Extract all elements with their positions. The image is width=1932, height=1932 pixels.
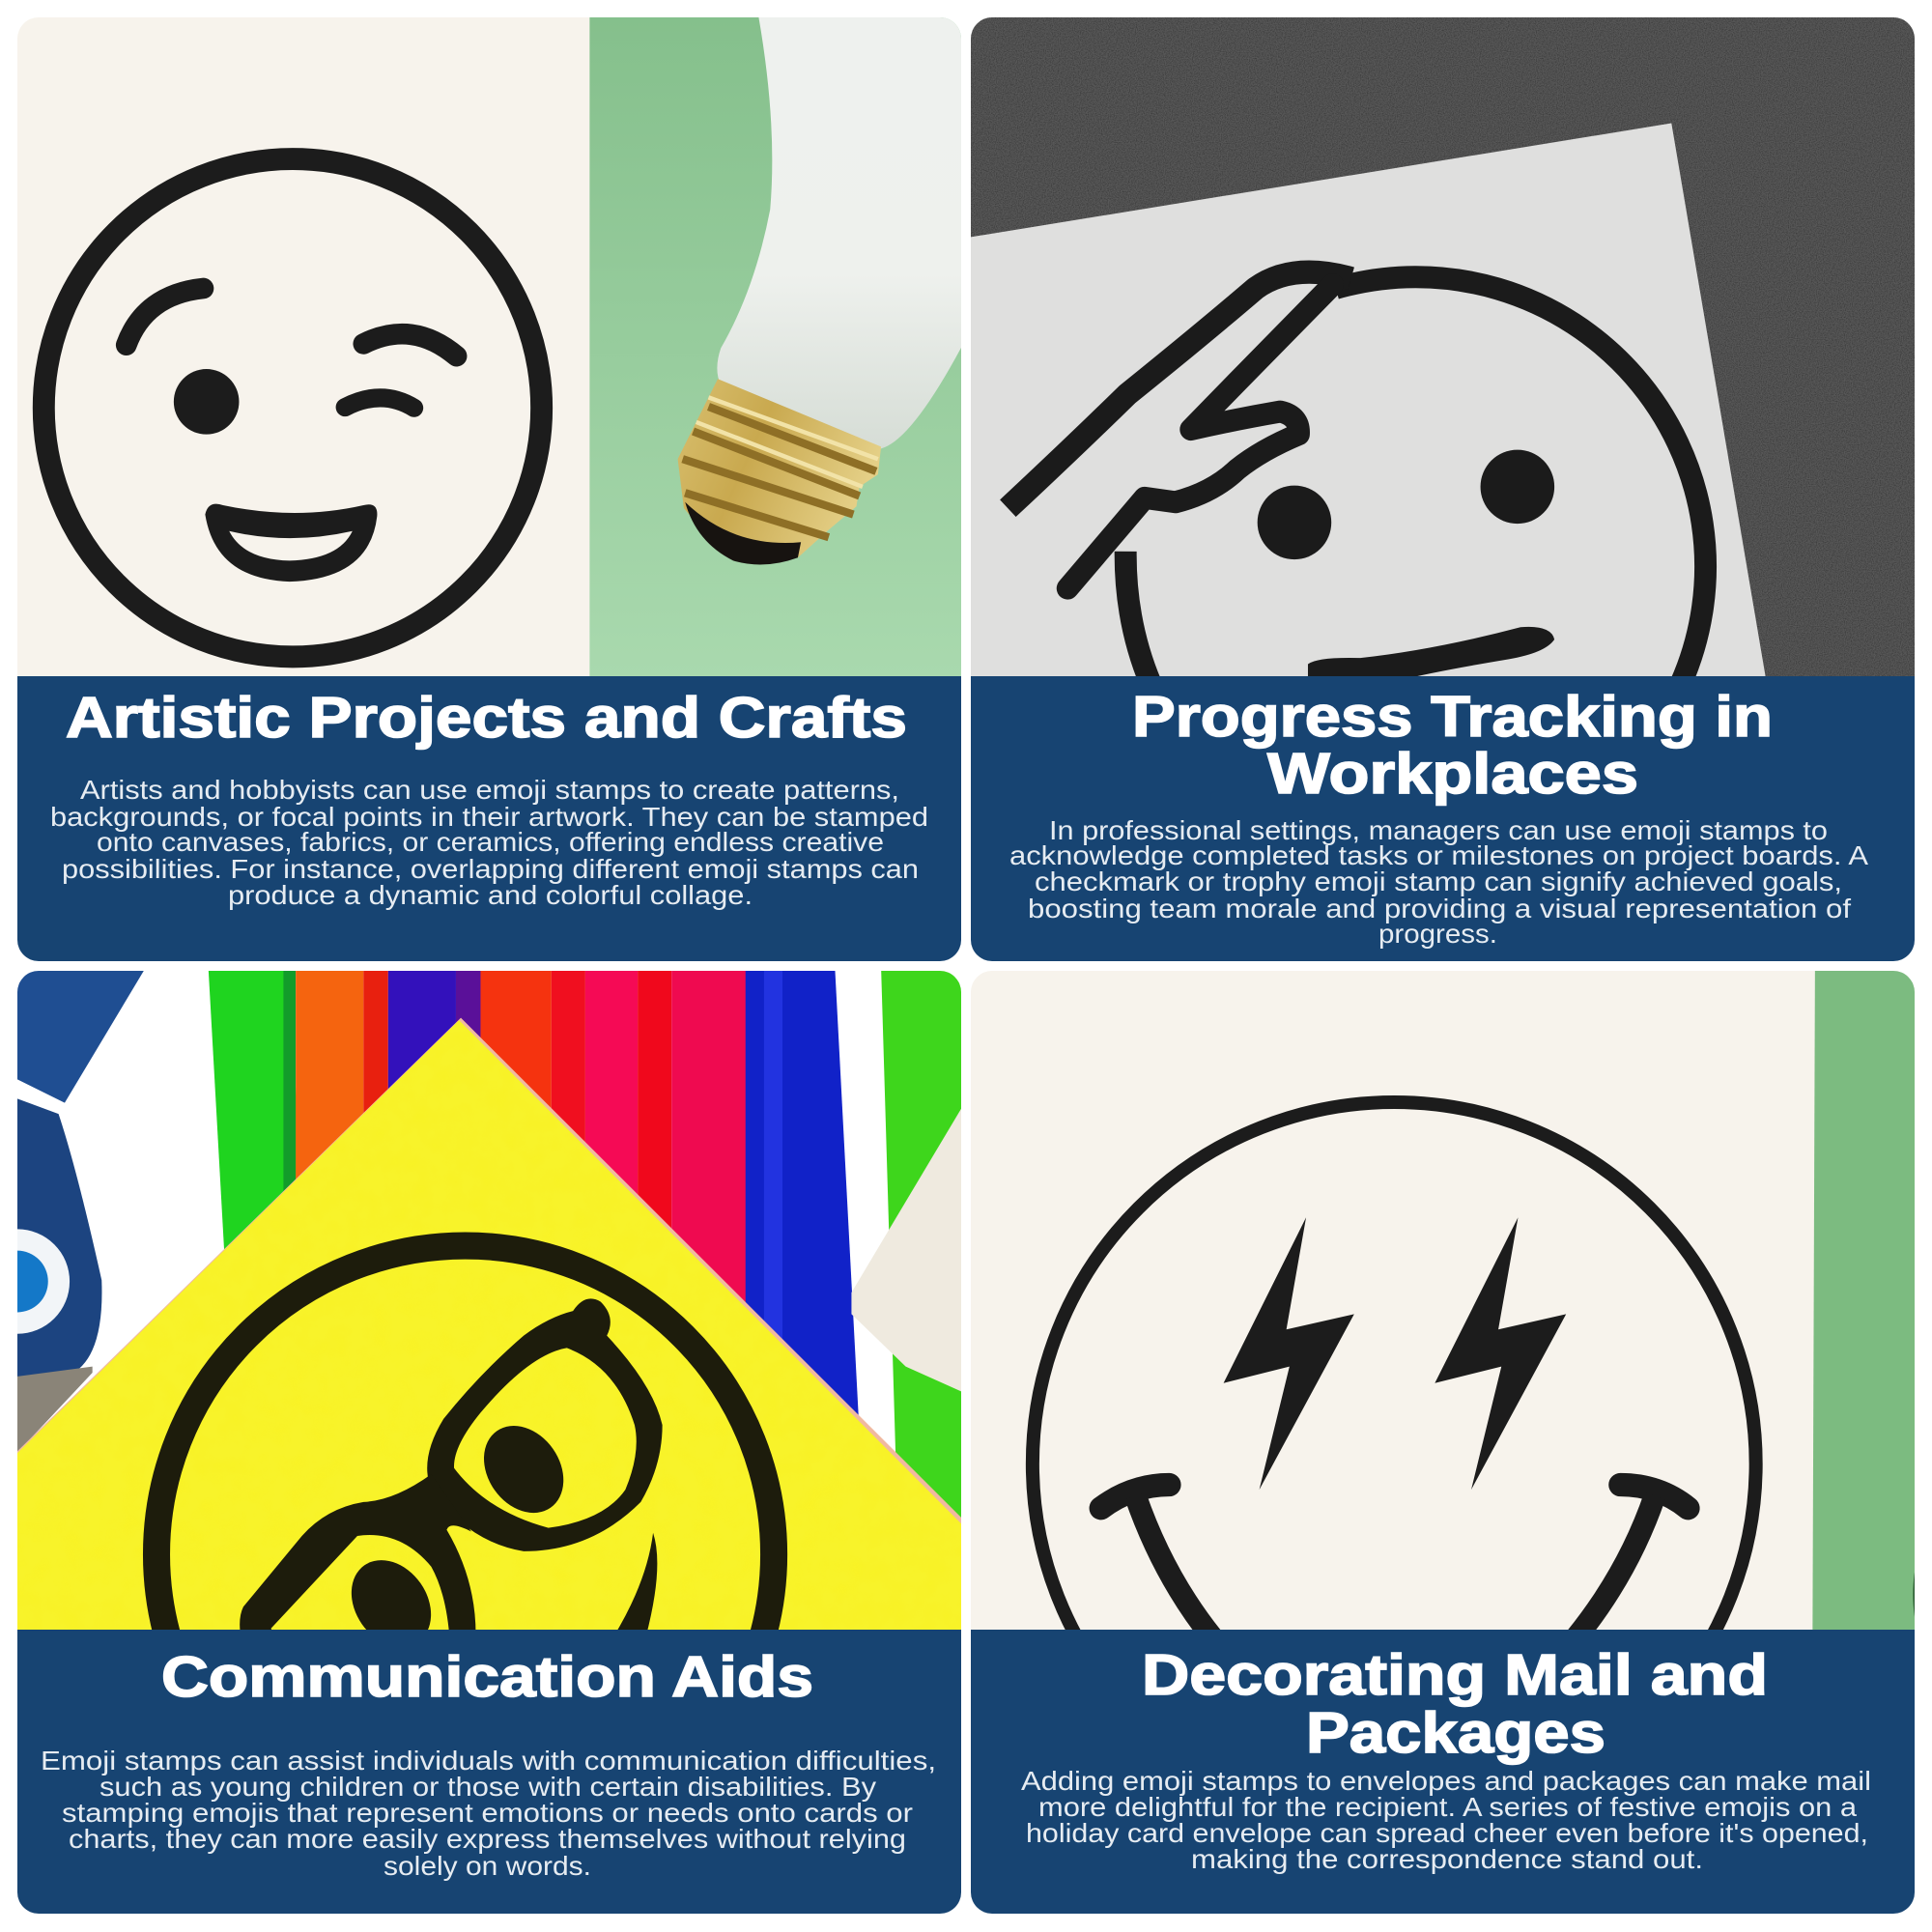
heading: Decorating Mail and (1142, 1643, 1768, 1707)
body text: charts, they can more easily express themselves without relying (69, 1824, 906, 1854)
body text (41, 1746, 936, 1881)
icon: saluting face (1008, 272, 1706, 684)
body text: In professional settings, managers can use emoji stamps to (1049, 815, 1828, 845)
body text: making the correspondence stand out. (1191, 1844, 1703, 1874)
heading: Packages (1306, 1701, 1605, 1765)
body text: backgrounds, or focal points in their artwork. They can be stamped (50, 802, 928, 832)
heading: Artistic Projects and Crafts (66, 686, 907, 750)
body text (1009, 815, 1869, 949)
panel: Communication Aids (0, 966, 967, 1915)
body text: produce a dynamic and colorful collage. (228, 880, 753, 910)
panel: Progress Tracking in Workplaces (966, 0, 1932, 961)
body text: possibilities. For instance, overlapping different emoji stamps can (62, 854, 919, 884)
caption panel (971, 1630, 1915, 1915)
body text: Adding emoji stamps to envelopes and packages can make mail (1021, 1766, 1871, 1796)
panel: Artistic Projects and Crafts (0, 0, 984, 961)
body text: checkmark or trophy emoji stamp can signify achieved goals, (1035, 867, 1842, 896)
body text: stamping emojis that represent emotions or needs onto cards or (62, 1798, 913, 1828)
body text: boosting team morale and providing a visual representation of (1028, 894, 1851, 923)
caption panel (17, 676, 961, 961)
body text: onto canvases, fabrics, or ceramics, offering endless creative (97, 827, 884, 857)
body text: Artists and hobbyists can use emoji stamps to create patterns, (80, 775, 899, 805)
icon: glasses face (143, 1233, 788, 1630)
body text: progress. (1378, 919, 1497, 949)
heading (1132, 685, 1773, 806)
body text: such as young children or those with certain disabilities. By (99, 1772, 876, 1802)
photo: saluting emoji stamp on white card (966, 0, 1932, 684)
heading: Communication Aids (161, 1645, 813, 1709)
icon: lightning bolt smiley (1026, 1095, 1763, 1630)
heading: Progress Tracking in (1132, 685, 1773, 749)
photo: lightning eyes emoji stamp (971, 971, 1915, 1630)
body text: holiday card envelope can spread cheer even before it's opened, (1026, 1818, 1868, 1848)
body text (1021, 1766, 1871, 1874)
heading (1142, 1643, 1768, 1765)
body text (50, 775, 928, 910)
pencils (209, 966, 967, 1546)
panel: Decorating Mail and Packages (966, 966, 1932, 1915)
caption panel (17, 1630, 961, 1915)
body text: solely on words. (384, 1851, 591, 1881)
body text: acknowledge completed tasks or milestones on project boards. A (1009, 840, 1869, 870)
photo: glasses emoji on yellow card with pencils (17, 971, 961, 1630)
icon: light bulb (678, 13, 964, 564)
photo: wink emoji stamp and light bulb (0, 0, 984, 678)
body text: Emoji stamps can assist individuals with communication difficulties, (41, 1746, 936, 1776)
eraser (851, 1098, 967, 1394)
yellow card (17, 1018, 961, 1524)
scissors (17, 971, 144, 1451)
icon: wink smiley face (43, 159, 542, 657)
body text: more delightful for the recipient. A series of festive emojis on a (1038, 1792, 1858, 1822)
heading: Workplaces (1267, 742, 1638, 806)
caption panel (971, 676, 1915, 961)
